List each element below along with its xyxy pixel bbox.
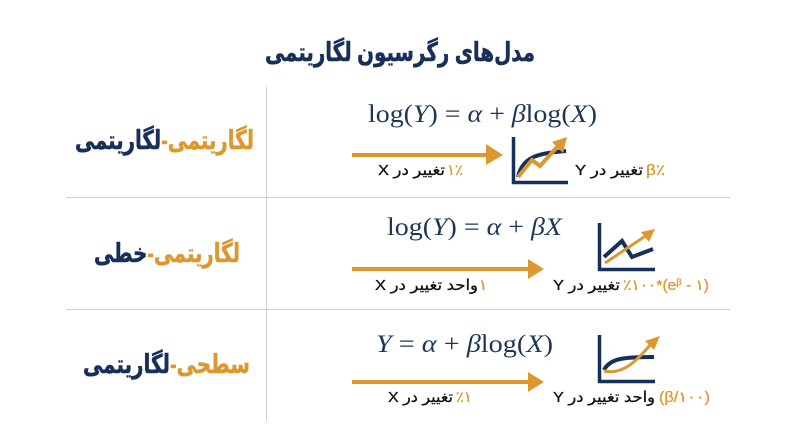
row 2 left caption: ۱	[479, 277, 487, 294]
row 2 right caption: β	[676, 277, 682, 287]
row 2 right caption	[553, 277, 709, 294]
row 3 right caption: واحد تغییر در Y	[553, 389, 655, 406]
title: مدل‌های رگرسیون لگاریتمی	[265, 37, 535, 68]
row 2 chart icon	[600, 223, 655, 270]
row 1 chart icon	[514, 137, 568, 182]
row 3 label: سطحی-لگاریتمی	[83, 349, 250, 379]
row 2 right caption: - ۱)	[682, 277, 709, 294]
row 2 formula: log(Y) = α + βX	[387, 214, 564, 241]
row 2 right caption: تغییر در Y	[553, 277, 620, 294]
row 3 left caption: تغییر در X	[388, 389, 453, 406]
row 3 arrow	[352, 372, 544, 392]
row 1 right caption: β٪	[646, 162, 665, 179]
row 1 right caption	[575, 162, 665, 179]
row 2 right caption: ٪۱۰۰*(e	[623, 277, 674, 294]
row 1 formula: log(Y) = α + βlog(X)	[368, 101, 597, 128]
row 2 arrow	[352, 259, 544, 279]
row 3 left caption: ٪۱	[456, 389, 472, 406]
row 1 right caption: تغییر در Y	[575, 162, 643, 179]
row 2 label: لگاریتمی-خطی	[94, 238, 240, 268]
row 3 right caption	[553, 389, 710, 406]
row 1 left caption: تغییر در X	[378, 162, 445, 179]
row 3 chart icon	[600, 335, 660, 382]
row 3 right caption: (β/۱۰۰)	[659, 389, 710, 406]
row 3 formula: Y = α + βlog(X)	[376, 331, 553, 358]
row 1 label: لگاریتمی-لگاریتمی	[75, 125, 254, 155]
row 1 arrow	[352, 144, 503, 165]
row 2 left caption: واحد تغییر در X	[375, 277, 478, 294]
row 1 left caption: ۱٪	[447, 162, 463, 179]
